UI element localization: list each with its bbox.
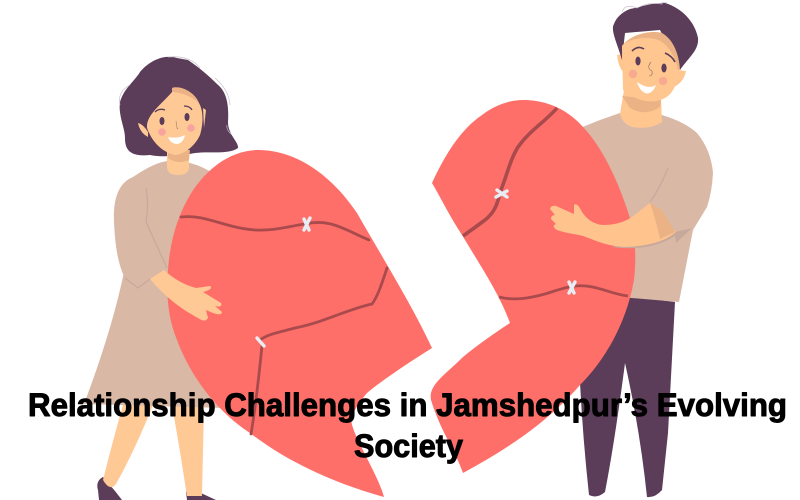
neck	[167, 150, 189, 175]
illustration: woman's arm and hand	[150, 270, 222, 320]
illustration: man's body behind the heart	[575, 113, 713, 497]
stitches on left heart	[257, 218, 310, 346]
smile	[637, 82, 656, 93]
crack lines on right heart	[463, 108, 628, 299]
face	[622, 38, 678, 101]
cheeks	[158, 128, 166, 136]
stitches on right heart	[496, 190, 575, 293]
illustration: man's head	[613, 2, 698, 128]
illustration: right half of broken heart	[431, 100, 635, 473]
forehead shadow	[622, 32, 680, 70]
illustration: woman's head	[119, 57, 238, 175]
eyes and brows	[635, 56, 641, 66]
crack lines on left heart	[181, 217, 387, 434]
eyes and brows	[160, 117, 164, 125]
hair	[120, 57, 238, 156]
hair	[613, 3, 698, 70]
title line 2: Society	[354, 428, 463, 464]
smile	[168, 135, 185, 144]
ear	[617, 54, 623, 72]
face	[147, 91, 202, 155]
illustration: man's arm and hand	[550, 203, 692, 248]
illustration: woman's body behind the heart	[84, 161, 225, 500]
cheeks	[629, 70, 637, 78]
neck	[620, 90, 662, 128]
ear	[138, 123, 148, 137]
title line 1: Relationship Challenges in Jamshedpur’s Evolving	[28, 387, 787, 423]
title	[28, 387, 787, 464]
illustration: left half of broken heart	[167, 150, 432, 497]
nose	[176, 121, 178, 129]
nose	[649, 62, 652, 76]
